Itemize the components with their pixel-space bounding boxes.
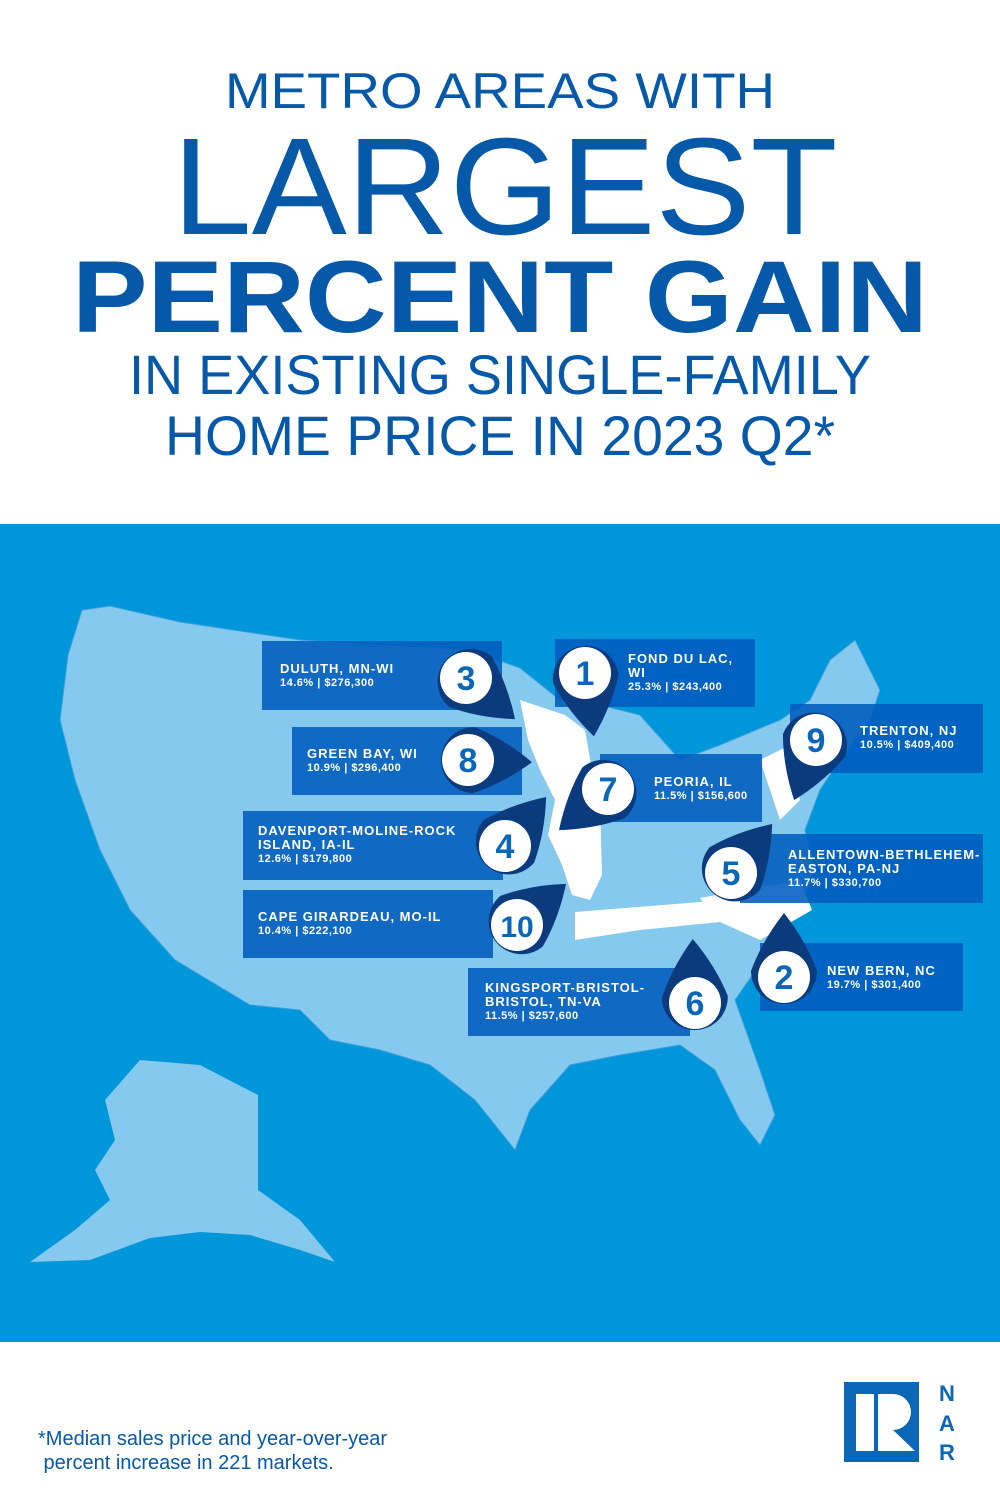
pin 9 <box>763 703 856 811</box>
box: Green Bay: 10.9% | $296,400 <box>307 762 401 774</box>
box: Green Bay: GREEN BAY, WI <box>307 746 418 761</box>
box: Kingsport: KINGSPORT-BRISTOL- <box>485 980 645 995</box>
pin 6: 6 <box>686 985 704 1023</box>
box: Fond du Lac <box>555 639 755 707</box>
footnote <box>38 1428 387 1474</box>
pin 2: 2 <box>775 959 793 997</box>
box: Kingsport: 11.5% | $257,600 <box>485 1010 579 1022</box>
box: Cape Girardeau: 10.4% | $222,100 <box>258 925 352 937</box>
title: PERCENT GAIN <box>72 240 928 354</box>
box: Peoria <box>600 754 762 822</box>
box: Davenport: ISLAND, IA-IL <box>258 837 356 852</box>
pin 10 <box>475 859 587 968</box>
map: Alaska <box>30 1060 335 1262</box>
pin 3 <box>424 635 536 744</box>
box: Duluth: DULUTH, MN-WI <box>280 661 394 676</box>
box: New Bern: NEW BERN, NC <box>827 963 936 978</box>
box: Fond du Lac: FOND DU LAC, <box>628 651 733 666</box>
map: contiguous US <box>60 606 880 1150</box>
box: Allentown: EASTON, PA-NJ <box>788 861 900 876</box>
title: HOME PRICE IN 2023 Q2* <box>165 404 835 467</box>
pin 1: 1 <box>576 655 594 693</box>
pin 1 <box>549 642 627 741</box>
box: Cape Girardeau: CAPE GIRARDEAU, MO-IL <box>258 909 442 924</box>
box: Allentown: ALLENTOWN-BETHLEHEM- <box>788 847 980 862</box>
callout boxes <box>243 639 983 1036</box>
box: Davenport <box>243 811 503 880</box>
title <box>72 63 928 467</box>
pin 5 <box>688 803 797 915</box>
pin 2 <box>751 913 817 1004</box>
box: Allentown <box>740 834 983 903</box>
box: Fond du Lac: WI <box>628 665 646 680</box>
box: Peoria: 11.5% | $156,600 <box>654 790 748 802</box>
box: Trenton: 10.5% | $409,400 <box>860 739 954 751</box>
box: Fond du Lac: 25.3% | $243,400 <box>628 681 722 693</box>
box: Green Bay <box>292 727 522 795</box>
footnote: *Median sales price and year-over-year <box>38 1428 387 1450</box>
logo: NAR: A <box>939 1411 955 1436</box>
pin 7: 7 <box>599 771 617 809</box>
box: Peoria: PEORIA, IL <box>654 774 733 789</box>
box: New Bern <box>760 943 963 1011</box>
pin 4 <box>462 776 571 888</box>
logo: NAR: N <box>939 1381 955 1406</box>
box: Trenton: TRENTON, NJ <box>860 723 957 738</box>
pin 4: 4 <box>496 828 515 866</box>
box: Kingsport <box>468 968 690 1036</box>
pin 8 <box>440 726 533 795</box>
title: LARGEST <box>172 110 838 264</box>
map panel <box>0 524 1000 1342</box>
box: Davenport: DAVENPORT-MOLINE-ROCK <box>258 823 456 838</box>
box: Trenton <box>790 704 983 773</box>
box: Cape Girardeau <box>243 890 493 958</box>
pin 7 <box>538 746 650 855</box>
box: Duluth <box>262 641 502 710</box>
pin 3: 3 <box>457 660 475 698</box>
pin 9: 9 <box>807 722 825 760</box>
box: Kingsport: BRISTOL, TN-VA <box>485 994 602 1009</box>
pin 6 <box>660 938 729 1031</box>
title: IN EXISTING SINGLE-FAMILY <box>129 343 871 406</box>
pin 8: 8 <box>459 742 477 780</box>
pin 10: 10 <box>500 911 534 944</box>
map: highlighted states <box>520 700 812 940</box>
logo: NAR <box>844 1381 955 1463</box>
title: METRO AREAS WITH <box>225 63 775 119</box>
box: New Bern: 19.7% | $301,400 <box>827 979 921 991</box>
box: Allentown: 11.7% | $330,700 <box>788 877 882 889</box>
box: Duluth: 14.6% | $276,300 <box>280 677 374 689</box>
box: Davenport: 12.6% | $179,800 <box>258 853 352 865</box>
footnote: percent increase in 221 markets. <box>44 1452 334 1474</box>
pin 5: 5 <box>722 855 740 893</box>
